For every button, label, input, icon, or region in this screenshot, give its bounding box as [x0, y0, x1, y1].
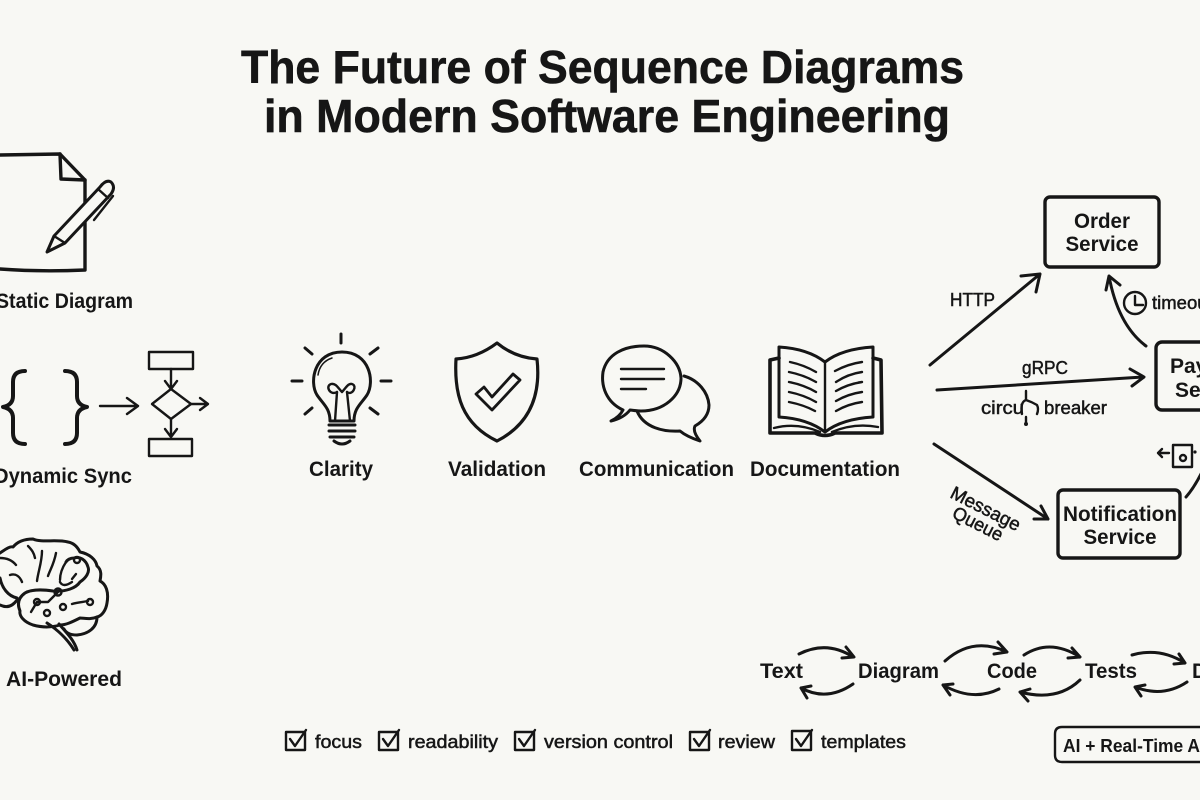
label: static diagram: Static Diagram — [0, 290, 133, 313]
label: tests: Tests — [1085, 660, 1137, 683]
item: focus — [286, 730, 362, 752]
icon: light bulb — [292, 334, 391, 444]
arrow: grpc: gRPC — [1022, 357, 1068, 378]
title — [241, 41, 964, 142]
icon: shield with check — [456, 343, 538, 441]
box: notification service — [1058, 490, 1180, 558]
icon: speech bubbles — [603, 346, 709, 441]
checklist — [286, 730, 906, 752]
panel: evolution stages — [0, 154, 208, 691]
arrow: grpc — [937, 357, 1144, 390]
item: version control: version control — [544, 731, 673, 752]
label: validation: Validation — [448, 458, 546, 481]
arrow: http — [930, 274, 1040, 365]
box: order service: Service — [1066, 233, 1138, 256]
arrow: message queue — [934, 444, 1048, 545]
arrow: notification to payment — [1186, 472, 1200, 497]
panel: benefits — [292, 334, 900, 481]
label: circuit breaker: circu — [981, 397, 1024, 418]
arrow: http: HTTP — [950, 289, 995, 310]
box: notification service: Service — [1084, 526, 1156, 549]
label: diagram: Diagram — [858, 660, 939, 683]
label: circuit breaker: breaker — [1044, 397, 1107, 418]
callout: ai and real-time — [1055, 727, 1200, 762]
box: order service — [1045, 197, 1159, 267]
label: text: Text — [760, 660, 803, 683]
icon: small gateway — [1158, 445, 1197, 467]
loop arrows — [799, 642, 1187, 701]
icon: open book — [770, 347, 882, 436]
arrow: timeout — [1106, 276, 1200, 346]
item: readability — [379, 730, 499, 752]
box: payment service — [1156, 342, 1200, 410]
label: clarity: Clarity — [309, 458, 373, 481]
label: ai-powered: AI-Powered — [6, 668, 122, 691]
arrow: message queue: Message — [947, 482, 1024, 535]
item: readability: readability — [408, 731, 499, 752]
icon: document and pen — [0, 154, 114, 271]
label: communication: Communication — [579, 458, 734, 481]
title: The Future of Sequence Diagrams — [241, 41, 964, 93]
item: templates — [792, 730, 906, 752]
item: review: review — [718, 731, 776, 752]
panel: microservices diagram — [930, 197, 1200, 558]
panel: workflow loop — [760, 642, 1200, 701]
item: focus: focus — [315, 731, 362, 752]
item: templates: templates — [821, 731, 906, 752]
title: in Modern Software Engineering — [264, 90, 950, 142]
icon: brain — [0, 539, 108, 650]
label: circuit breaker — [981, 391, 1107, 426]
item: review — [690, 730, 776, 752]
arrow: message queue: Queue — [949, 502, 1007, 545]
box: notification service: Notification — [1063, 503, 1177, 526]
label: code: Code — [987, 660, 1037, 683]
label: documentation: Documentation — [750, 458, 900, 481]
icon: code braces to flowchart — [3, 352, 208, 456]
box: order service: Order — [1074, 210, 1130, 233]
